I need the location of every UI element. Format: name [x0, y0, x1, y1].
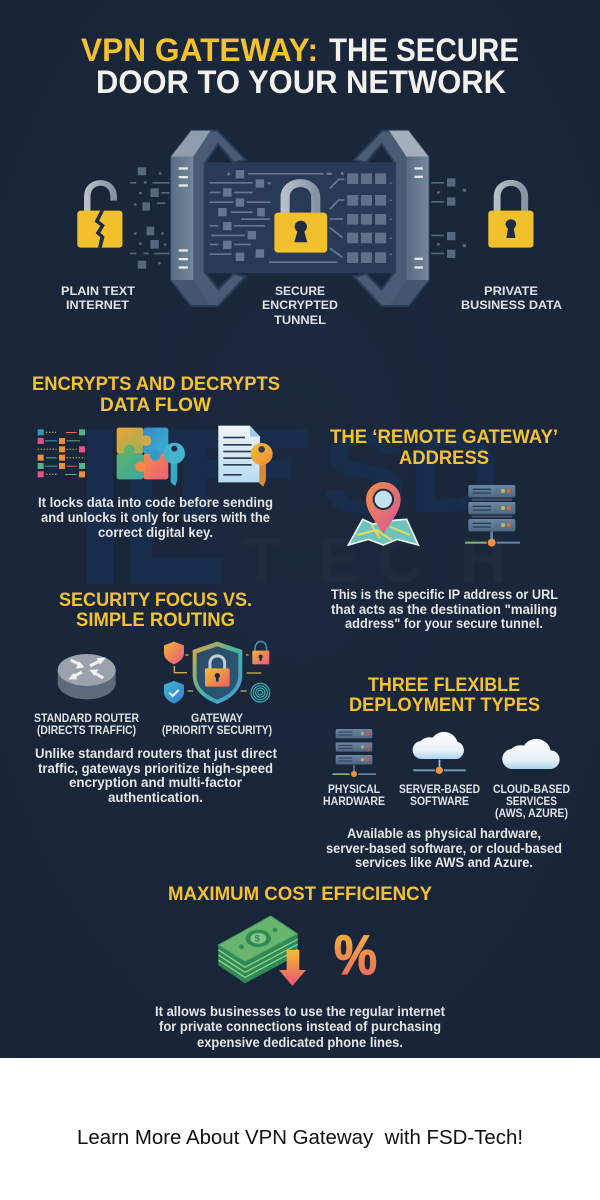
- heading: ADDRESS: [399, 448, 489, 469]
- gateway label: [162, 713, 272, 737]
- heading: DEPLOYMENT TYPES: [349, 695, 540, 716]
- icon: document with key: [218, 426, 273, 487]
- icon: cloud services: [502, 739, 560, 769]
- cloud-based services label: [493, 784, 570, 820]
- hero labels: INTERNET: [66, 300, 129, 312]
- description: [35, 746, 277, 805]
- description: It allows businesses to use the regular internet: [155, 1004, 445, 1019]
- physical hardware label: HARDWARE: [323, 796, 385, 808]
- watermark: FSD Tech logo: TECH: [242, 524, 506, 596]
- gateway label: (PRIORITY SECURITY): [162, 725, 272, 737]
- description: services like AWS and Azure.: [355, 855, 533, 870]
- description: Available as physical hardware,: [347, 826, 541, 841]
- connector strokes: [330, 179, 344, 257]
- icon: puzzle with key: [117, 428, 185, 486]
- hero diagram: secure tunnel: [77, 131, 533, 306]
- heading: [59, 590, 252, 631]
- icon: money stack with down arrow: [218, 916, 306, 986]
- description: traffic, gateways prioritize high-speed: [38, 761, 273, 776]
- physical hardware label: [323, 784, 385, 808]
- encrypted data stream: [210, 170, 343, 263]
- hero labels: [61, 286, 562, 327]
- description: [331, 587, 558, 631]
- title: VPN GATEWAY:: [81, 32, 318, 68]
- description: [38, 495, 273, 540]
- hero labels: SECURE: [275, 286, 325, 298]
- description: for private connections instead of purchasing: [159, 1019, 441, 1034]
- panel: remote gateway address: [330, 427, 558, 631]
- heading: ENCRYPTS AND DECRYPTS: [32, 374, 280, 395]
- description: Unlike standard routers that just direct: [35, 746, 277, 761]
- description: It locks data into code before sending: [38, 495, 273, 510]
- panel: cost efficiency: [155, 884, 445, 1050]
- panel: security focus vs routing: [34, 590, 277, 805]
- data bits entering from the internet: [130, 167, 170, 269]
- description: that acts as the destination "mailing: [331, 602, 557, 617]
- description: [326, 826, 562, 870]
- physical hardware label: PHYSICAL: [328, 784, 380, 796]
- hero labels: BUSINESS DATA: [461, 300, 562, 312]
- icon: money stack with down arrow: $: [255, 934, 261, 944]
- cloud-based services label: CLOUD-BASED: [493, 784, 570, 796]
- title: [81, 32, 519, 100]
- heading: DATA FLOW: [100, 395, 211, 416]
- icon: broken open padlock: [77, 183, 122, 248]
- description: encryption and multi-factor: [69, 775, 243, 790]
- description: correct digital key.: [98, 525, 213, 540]
- heading: SECURITY FOCUS VS.: [59, 590, 252, 611]
- hero labels: ENCRYPTED: [262, 300, 338, 312]
- title: DOOR TO YOUR NETWORK: [96, 64, 506, 100]
- icon: map pin: [348, 482, 418, 545]
- server-based software label: [399, 784, 480, 808]
- panel: encrypts and decrypts: [32, 374, 280, 540]
- hero labels: PRIVATE: [484, 286, 538, 298]
- icon: server-based cloud: [413, 732, 466, 774]
- description: This is the specific IP address or URL: [331, 587, 558, 602]
- icon: scrambled code grid: [38, 429, 85, 477]
- heading: MAXIMUM COST EFFICIENCY: [168, 884, 432, 905]
- icon: closed padlock: [488, 183, 533, 248]
- router label: (DIRECTS TRAFFIC): [37, 725, 136, 737]
- description: authentication.: [108, 790, 203, 805]
- icon: centre padlock: [274, 183, 327, 253]
- watermark: FSD Tech logo: [87, 410, 506, 596]
- heading: [32, 374, 280, 416]
- hero labels: TUNNEL: [274, 315, 326, 327]
- panel: deployment types: [323, 675, 570, 870]
- description: and unlocks it only for users with the: [41, 510, 270, 525]
- server-based software label: SERVER-BASED: [399, 784, 480, 796]
- router label: [34, 713, 140, 737]
- icon: percent sign: %: [334, 923, 377, 986]
- data bits leaving to private network: [431, 178, 466, 258]
- heading: SIMPLE ROUTING: [76, 610, 235, 631]
- server-based software label: SOFTWARE: [410, 796, 469, 808]
- cloud-based services label: (AWS, AZURE): [495, 808, 568, 820]
- tunnel panel: [205, 162, 395, 273]
- icon: server stack: [465, 485, 520, 547]
- gateway label: GATEWAY: [191, 713, 243, 725]
- right gateway pillar: [354, 131, 429, 306]
- description: server-based software, or cloud-based: [326, 841, 562, 856]
- description: address" for your secure tunnel.: [345, 616, 543, 631]
- heading: THREE FLEXIBLE: [368, 675, 520, 696]
- title: THE SECURE: [329, 32, 519, 68]
- watermark: FSD Tech logo: SD: [321, 410, 501, 537]
- router label: STANDARD ROUTER: [34, 713, 140, 725]
- heading: [330, 427, 558, 469]
- icon: physical server: [332, 729, 376, 777]
- cloud-based services label: SERVICES: [506, 796, 557, 808]
- left gateway pillar: [171, 131, 246, 306]
- footer call to action: Learn More About VPN Gateway with FSD-Tech!: [77, 1127, 523, 1149]
- icon: standard router: [58, 654, 116, 699]
- right grid of encrypted blocks: [347, 173, 392, 263]
- hero labels: PLAIN TEXT: [61, 286, 135, 298]
- description: expensive dedicated phone lines.: [197, 1035, 403, 1050]
- description: [155, 1004, 445, 1050]
- icon: gateway shield: [164, 641, 270, 704]
- heading: THE ‘REMOTE GATEWAY’: [330, 427, 558, 448]
- heading: [349, 675, 540, 716]
